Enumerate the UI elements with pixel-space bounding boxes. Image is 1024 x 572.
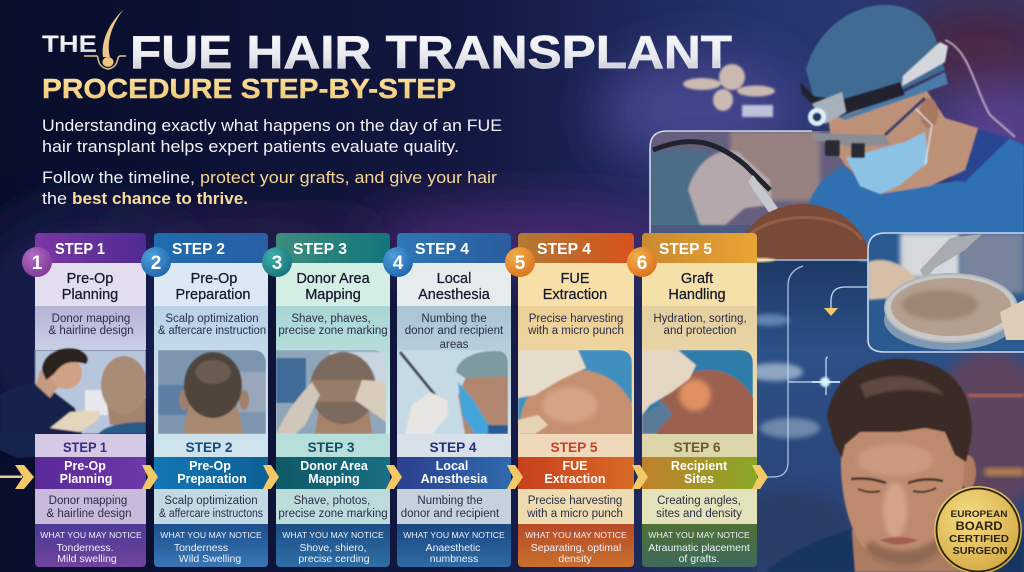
gloved hand — [688, 151, 772, 225]
text: step 4 description: Numbing the — [421, 313, 487, 325]
badge: European Board Certified Surgeon: SURGEON — [952, 546, 1008, 557]
lower title band — [35, 457, 146, 489]
surgical cap — [806, 5, 945, 118]
surgical mask — [846, 132, 928, 194]
text: lower title — [544, 459, 606, 486]
intro text: Understanding exactly what happens on the day of an FUE — [42, 116, 502, 135]
doctor neck — [36, 370, 62, 398]
text: step 1 description: Donor mapping — [52, 313, 130, 325]
step number 3: 3 — [272, 253, 282, 274]
icon: hair follicle — [84, 9, 126, 69]
text: lower description: Precise harvesting — [528, 495, 622, 507]
notice block — [35, 524, 146, 567]
text: step 6 description — [653, 313, 747, 337]
text: what you may notice: WHAT YOU MAY NOTICE — [403, 530, 505, 540]
headlight — [812, 92, 846, 124]
text: what you may notice: Separating, optimal — [531, 542, 621, 554]
heading: graft handling — [668, 271, 726, 303]
intro callout — [42, 168, 497, 208]
intro callout: best chance to thrive. — [72, 189, 248, 208]
photo: anesthesia — [397, 350, 508, 434]
panel: extraction close-up — [649, 130, 869, 233]
handpiece — [653, 142, 770, 190]
header — [35, 233, 146, 263]
text: step 5 description — [527, 313, 624, 337]
doctor hair — [42, 348, 88, 380]
step number 5 — [505, 247, 535, 277]
description block — [35, 306, 146, 350]
title — [42, 9, 732, 104]
step number 5: 5 — [515, 253, 526, 274]
text: step 3 description: precise zone marking — [278, 325, 388, 337]
face — [841, 425, 964, 566]
step number 2: 2 — [151, 253, 161, 274]
text: lower description: & affercare instructons — [159, 508, 263, 520]
text: what you may notice: WHAT YOU MAY NOTICE — [525, 530, 627, 540]
photo: donor zone marking — [276, 350, 386, 434]
badge: European Board Certified Surgeon: CERTIFIED — [949, 533, 1009, 545]
text: what you may notice: Wild Swelling — [179, 553, 241, 565]
heading: planning: Planning — [62, 287, 118, 303]
text: what you may notice: Atraumatic placement — [648, 542, 750, 554]
text: what you may notice — [403, 530, 505, 565]
intro text: hair transplant helps expert patients evaluate quality. — [42, 137, 459, 156]
text: what you may notice: WHAT YOU MAY NOTICE — [40, 530, 142, 540]
step number 1 — [22, 247, 52, 277]
heading: planning — [62, 271, 118, 303]
heading: donor area mapping: Mapping — [305, 287, 361, 303]
label: lower step 1: STEP 1 — [63, 440, 107, 455]
text: lower title: Anesthesia — [421, 472, 488, 486]
text: what you may notice: WHAT YOU MAY NOTICE — [648, 530, 750, 540]
panel: step 1 — [0, 233, 147, 567]
text: step 4 description: areas — [440, 339, 469, 351]
text: what you may notice: Shove, shiero, — [299, 542, 367, 554]
patient head — [101, 356, 147, 414]
text: what you may notice: Tonderness. — [56, 542, 114, 554]
heading: step 5 (graft): STEP 5 — [659, 241, 712, 258]
text: what you may notice — [525, 530, 627, 565]
text: step 5 description: Precise harvesting — [529, 313, 623, 325]
intro callout: Follow the timeline, — [42, 168, 195, 187]
arrow: down to petri link — [824, 308, 838, 316]
petri dish — [884, 314, 1006, 350]
panel: step 6 — [627, 233, 760, 567]
badge: European Board Certified Surgeon: BOARD — [956, 519, 1003, 533]
badge: European Board Certified Surgeon: EUROPEAN — [950, 509, 1008, 519]
heading: local anesthesia — [418, 271, 491, 303]
text: lower title — [421, 459, 488, 486]
text: lower description — [278, 495, 388, 520]
text: step 1 description — [48, 313, 134, 337]
step number 1: 1 — [32, 253, 43, 274]
text: lower description — [401, 495, 500, 520]
panel: step 4 — [383, 233, 511, 567]
text: what you may notice: Anaesthetic — [426, 542, 480, 554]
ear — [960, 455, 976, 489]
arrow: step 3 to 4 — [386, 465, 402, 489]
label: lower step 4: STEP 4 — [430, 440, 477, 455]
text: what you may notice — [648, 530, 750, 565]
panel: step 3 — [262, 233, 390, 567]
heading: step 4: STEP 4 — [415, 241, 469, 258]
tool — [920, 234, 982, 280]
text: what you may notice: of grafts. — [679, 553, 719, 565]
text: lower title: Sites — [684, 472, 714, 486]
photo: extraction — [518, 350, 632, 434]
step number 4 — [383, 247, 413, 277]
doctor torso — [0, 384, 82, 434]
text: step 3 description — [278, 313, 388, 337]
man portrait — [765, 359, 1024, 572]
text: what you may notice: density — [558, 553, 592, 565]
text: lower description: Scalp optimization — [164, 495, 258, 507]
lower description — [35, 489, 146, 524]
text: step 4 description — [405, 313, 504, 351]
heading: step 2: STEP 2 — [172, 241, 225, 258]
heading: step 1: STEP 1 — [55, 241, 105, 258]
heading: preparation: Pre-Op — [191, 271, 237, 287]
heading: local anesthesia: Anesthesia — [418, 287, 491, 303]
intro text — [42, 116, 502, 156]
text: step 2 description: Scalp optimization — [165, 313, 259, 325]
surgical loupes — [811, 133, 890, 147]
text: lower title: Pre-Op — [189, 459, 231, 473]
text: lower title — [671, 459, 728, 486]
text: what you may notice: Tonderness — [174, 542, 228, 554]
step number 2 — [141, 247, 171, 277]
text: step 6 description: Hydration, sorting, — [653, 313, 747, 325]
title block — [35, 263, 146, 306]
text: lower description: Shave, photos, — [294, 495, 370, 507]
text: lower description: with a micro punch — [526, 508, 623, 520]
heading: local anesthesia: Local — [437, 271, 471, 287]
headband — [800, 82, 905, 116]
text: lower title: Mapping — [308, 472, 360, 486]
text: lower description: sites and density — [656, 508, 742, 520]
intro callout: protect your grafts, and give your hair — [200, 168, 497, 187]
text: step 5 description: with a micro punch — [527, 325, 624, 337]
photo: back of head — [158, 350, 266, 434]
heading: planning: Pre-Op — [67, 271, 113, 287]
subtitle: PROCEDURE STEP-BY-STEP — [42, 73, 456, 104]
heading: graft handling: Handling — [668, 287, 726, 303]
patient neck — [106, 398, 146, 425]
glove — [50, 410, 100, 432]
text: lower title: Planning — [60, 472, 112, 486]
label: lower step 3: STEP 3 — [308, 440, 355, 455]
text: what you may notice — [282, 530, 384, 565]
text: lower title — [177, 459, 247, 486]
text: lower title: Preparation — [177, 472, 247, 486]
label: lower step 5: STEP 5 — [550, 440, 598, 455]
scrubs — [808, 138, 1024, 262]
timeline arrows — [0, 465, 768, 489]
lower step label — [35, 434, 146, 457]
ceiling lamp — [683, 64, 775, 117]
collar — [950, 128, 1010, 182]
text: lower description — [526, 495, 623, 520]
text: lower description: & hairline design — [46, 508, 132, 520]
title: FUE Hair Transplant: FUE HAIR TRANSPLANT — [130, 26, 732, 78]
text: lower title: Pre-Op — [64, 459, 106, 473]
text: what you may notice: precise cerding — [298, 553, 370, 565]
intro callout: the — [42, 189, 67, 208]
step number 6 — [627, 247, 657, 277]
eyes and brows — [851, 478, 943, 492]
text: step 1 description: & hairline design — [48, 325, 134, 337]
text: step 2 description: & aftercare instruction — [158, 325, 266, 337]
heading: donor area mapping — [296, 271, 371, 303]
heading: step 4 (extraction): STEP 4 — [537, 241, 591, 258]
arrow: step 4 to 5 — [507, 465, 523, 489]
text: lower title: Extraction — [544, 472, 606, 486]
text: what you may notice — [40, 530, 142, 565]
text: step 6 description: and protection — [664, 325, 736, 337]
doctor arm over card — [0, 432, 35, 458]
heading: FUE extraction — [543, 271, 607, 303]
doctor face — [50, 357, 82, 389]
step number 4: 4 — [393, 253, 404, 274]
text: lower title — [300, 459, 369, 486]
text: what you may notice: numbness — [430, 553, 478, 565]
text: lower title: Donor Area — [300, 459, 369, 473]
text: lower title — [60, 459, 112, 486]
text: lower title: FUE — [562, 459, 588, 473]
neck and face — [828, 88, 978, 194]
heading: preparation — [176, 271, 250, 303]
step number 6: 6 — [637, 253, 647, 274]
neck — [852, 520, 968, 572]
photo: doctor and patient — [0, 348, 147, 434]
text: lower description: Numbing the — [417, 495, 483, 507]
text: lower description: donor and recipient — [401, 508, 500, 520]
text: lower description — [46, 495, 132, 520]
text: lower description — [656, 495, 742, 520]
arrow: step 5 to 6 — [632, 465, 648, 489]
text: lower title: Local — [436, 459, 468, 473]
text: step 2 description — [158, 313, 266, 337]
arrow: step 1 to 2 — [142, 465, 158, 489]
title: THE: THE — [42, 31, 97, 58]
text: what you may notice: WHAT YOU MAY NOTICE — [282, 530, 384, 540]
heading: preparation: Preparation — [176, 287, 250, 303]
text: lower description: precise zone marking — [278, 508, 388, 520]
heading: donor area mapping: Donor Area — [296, 271, 371, 287]
photo: graft handling — [642, 350, 753, 434]
arrow: timeline entry — [0, 465, 34, 489]
text: step 3 description: Shave, phaves, — [291, 313, 371, 325]
glow: connector sparkles — [739, 258, 830, 387]
heading: step 3: STEP 3 — [293, 241, 347, 258]
panel: step 2 — [141, 233, 268, 567]
heading: FUE extraction: Extraction — [543, 287, 607, 303]
hair — [827, 359, 972, 462]
surgeon — [800, 5, 1024, 262]
patient shirt — [98, 422, 146, 434]
heading: graft handling: Graft — [681, 271, 713, 287]
heading: FUE extraction: FUE — [560, 271, 590, 287]
text: what you may notice: WHAT YOU MAY NOTICE — [160, 530, 262, 540]
patient scalp — [746, 204, 868, 260]
arrow: step 6 onward — [752, 465, 768, 489]
text: lower title: Recipient — [671, 459, 728, 473]
text: lower description: Creating angles, — [657, 495, 741, 507]
hand — [868, 260, 918, 300]
step number 3 — [262, 247, 292, 277]
panel: graft petri dish — [868, 233, 1024, 352]
mouth — [880, 537, 918, 544]
connector lines — [757, 260, 868, 477]
text: lower description: Donor mapping — [49, 495, 127, 507]
text: what you may notice: Mild swelling — [57, 553, 117, 565]
text: what you may notice — [160, 530, 262, 565]
badge: European Board Certified Surgeon — [934, 486, 1022, 572]
text: lower description — [159, 495, 263, 520]
arrow: step 2 to 3 — [263, 465, 279, 489]
text: step 4 description: donor and recipient — [405, 325, 504, 337]
shirt — [765, 528, 1024, 572]
label: lower step 6: STEP 6 — [674, 440, 721, 455]
label: lower step 2: STEP 2 — [186, 440, 232, 455]
panel: step 5 — [505, 233, 636, 567]
